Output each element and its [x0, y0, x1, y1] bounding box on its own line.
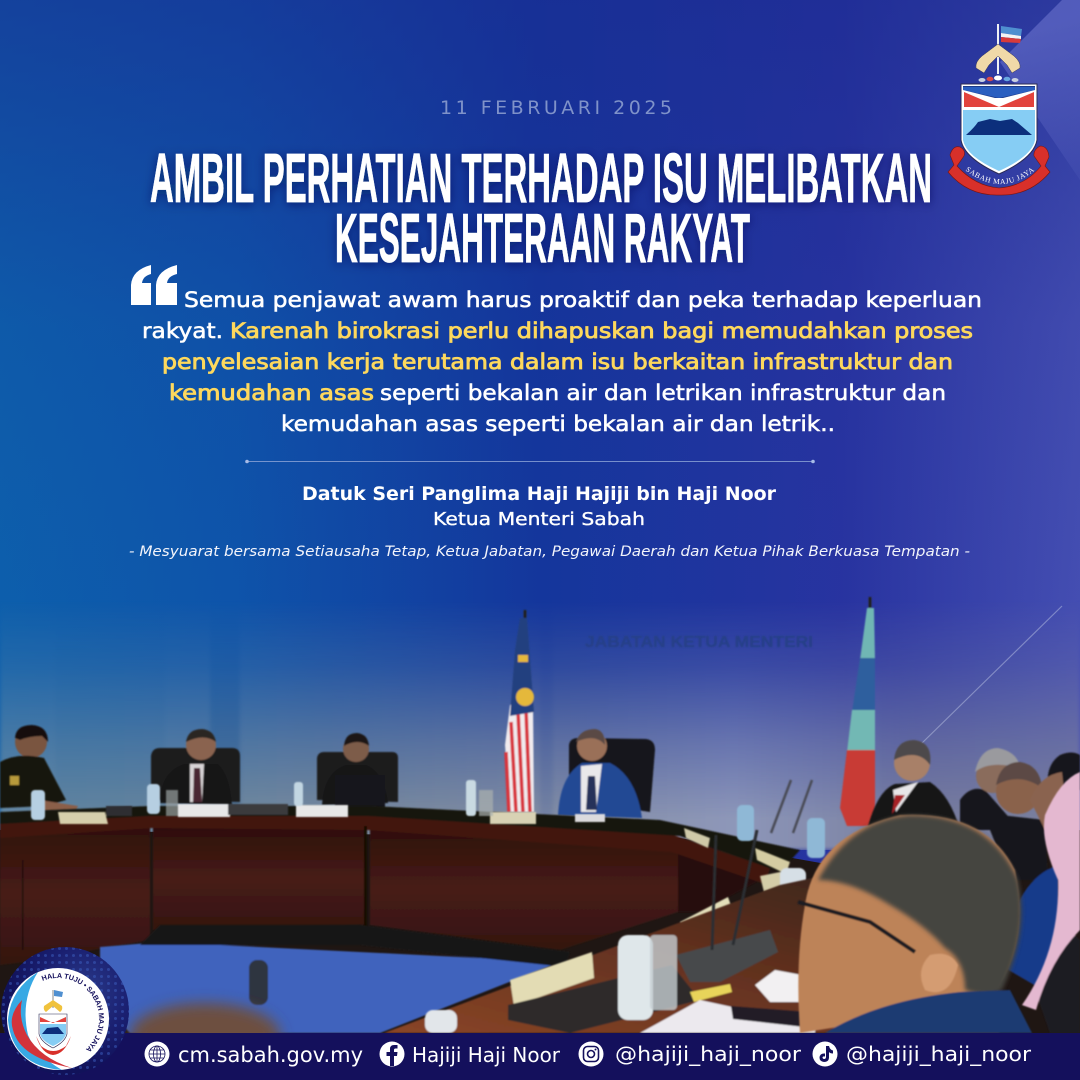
title	[150, 139, 932, 277]
quote text: kemudahan asas	[169, 381, 374, 406]
icon: quotation mark	[131, 265, 177, 305]
person with tie and chair	[151, 729, 240, 805]
quote text: Karenah birokrasi perlu dihapuskan bagi memudahkan proses	[230, 319, 973, 344]
wall	[0, 622, 1080, 850]
Chief Minister with chair	[558, 729, 655, 818]
mini coat of arms	[36, 990, 71, 1055]
footer bar	[0, 1033, 1080, 1080]
footer link: instagram: @hajiji_haji_noor	[615, 1042, 802, 1066]
person at right with glasses	[868, 740, 960, 830]
icon: circular Hala Tuju logo: HALA TUJU • SABAH MAJU JAYA	[41, 973, 104, 1052]
flag: Sabah	[840, 597, 875, 826]
flag: Malaysia	[505, 610, 534, 812]
chairs and seated people	[0, 725, 1080, 1000]
quote text: penyelesaian kerja terutama dalam isu berkaitan infrastruktur dan	[162, 350, 953, 375]
wall sign: JABATAN KETUA MENTERI	[585, 634, 813, 651]
flag and pole	[998, 24, 1022, 74]
icon: circular Hala Tuju logo	[1, 947, 129, 1075]
person left in uniform	[0, 725, 78, 812]
main table	[0, 806, 800, 965]
wall diagonal light line	[920, 606, 1062, 745]
speaker role: Ketua Menteri Sabah	[433, 509, 645, 530]
footer link: website: cm.sabah.gov.my	[178, 1043, 363, 1067]
speaker name: Datuk Seri Panglima Haji Hajiji bin Haji Noor	[302, 483, 777, 505]
foreground table	[384, 830, 1000, 1033]
people at far right	[960, 748, 1080, 1000]
icon: Sabah coat of arms	[948, 24, 1050, 196]
motto scroll: SABAH MAJU JAYA	[966, 167, 1034, 184]
person on phone with chair	[317, 733, 398, 809]
wreath beads	[978, 76, 1018, 82]
arms	[976, 44, 1020, 73]
motto scroll	[948, 146, 1050, 196]
quote text: rakyat.	[142, 319, 223, 344]
divider	[245, 460, 815, 463]
date: 11 FEBRUARI 2025	[440, 97, 672, 119]
dark base below wall	[0, 830, 1080, 1035]
shield	[961, 84, 1037, 174]
event note: - Mesyuarat bersama Setiausaha Tetap, Ketua Jabatan, Pegawai Daerah dan Ketua Pihak Berkuasa Tempatan -	[129, 544, 970, 560]
name cards and bottles on table	[31, 780, 825, 936]
person with pink hijab	[1022, 772, 1080, 1033]
quote text	[142, 288, 982, 437]
quote text: seperti bekalan air dan letrikan infrastruktur dan	[380, 381, 946, 406]
quote text: kemudahan asas seperti bekalan air dan letrik..	[281, 412, 835, 437]
photo: meeting room	[0, 596, 1080, 1033]
carpet	[100, 925, 570, 1067]
footer link: tiktok: @hajiji_haji_noor	[846, 1042, 1032, 1066]
quote text: Semua penjawat awam harus proaktif dan peka terhadap keperluan	[184, 288, 982, 313]
footer link: facebook: Hajiji Haji Noor	[412, 1043, 561, 1067]
foreground person head	[798, 815, 1032, 1033]
